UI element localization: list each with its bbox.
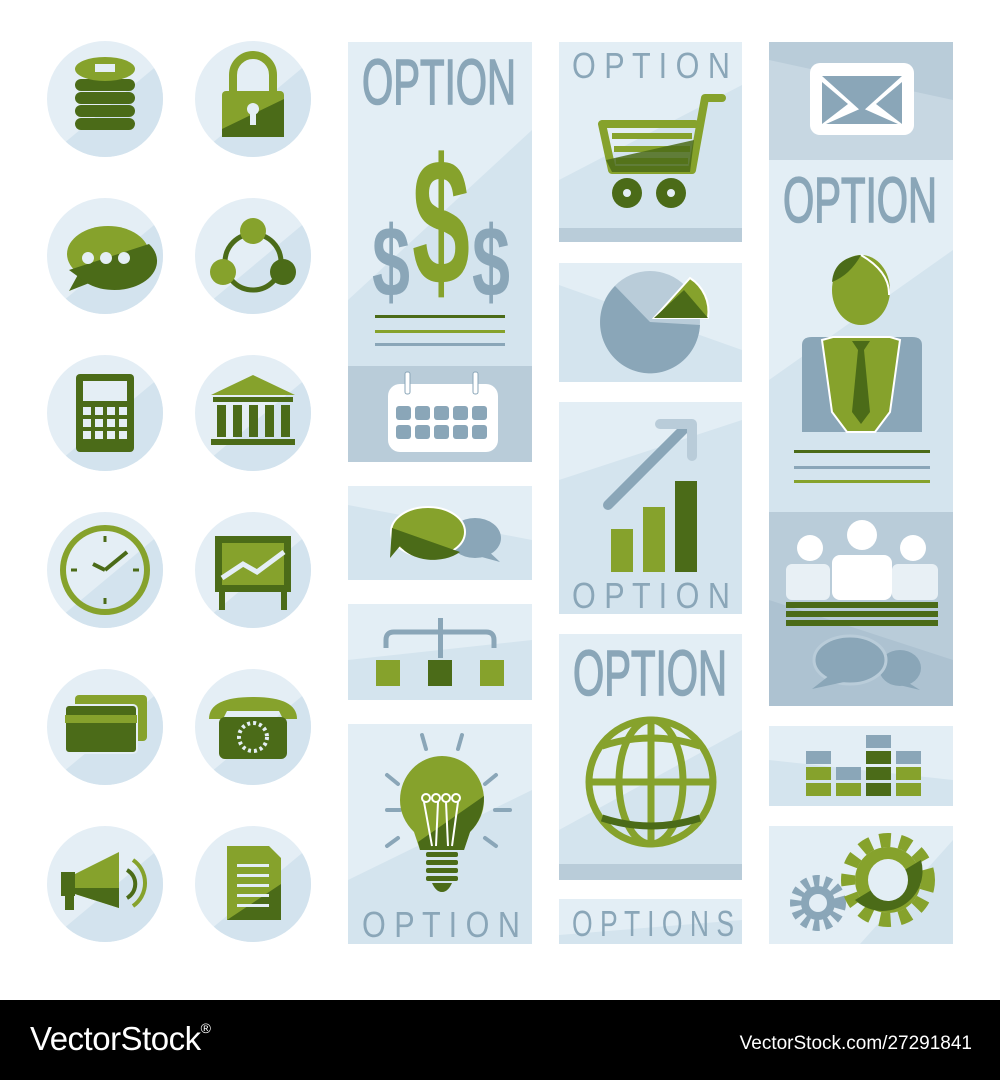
icon: calendar xyxy=(388,372,498,452)
panel: money option xyxy=(348,42,532,462)
panel: envelope xyxy=(769,42,953,160)
icon: arrow xyxy=(608,424,692,505)
heading: OPTION: OPTION xyxy=(362,46,516,118)
panel: globe option xyxy=(559,634,742,880)
circle icon: bank xyxy=(193,355,313,473)
heading: OPTION: O P T I O N xyxy=(572,45,730,86)
main artwork xyxy=(47,41,953,944)
icon: big gear xyxy=(848,840,928,920)
footer: watermark bar xyxy=(0,1000,1000,1080)
bar chart xyxy=(611,481,697,572)
panel: pie chart xyxy=(559,263,742,382)
icon: dollar signs xyxy=(372,122,510,323)
panel: OPTIONS xyxy=(559,899,742,944)
circle icon: clock xyxy=(45,512,165,630)
circle icon: coins xyxy=(45,41,165,159)
label: OPTION: O P T I O N xyxy=(362,904,520,945)
icon: dollar signs: $ xyxy=(412,122,470,323)
icon: team xyxy=(786,520,938,626)
panel: person option xyxy=(769,160,953,512)
panel: shopping cart option xyxy=(559,42,742,242)
icon: cart xyxy=(602,98,722,208)
circle icon: credit cards xyxy=(45,669,165,787)
image id: VectorStock.com/27291841 xyxy=(740,1033,972,1054)
icon: globe xyxy=(589,720,713,844)
heading: OPTION: OPTION xyxy=(573,637,727,709)
circle icon: calculator xyxy=(45,355,165,473)
circle icon: speech bubble xyxy=(45,198,165,316)
text lines xyxy=(794,450,930,483)
circle icon: padlock xyxy=(193,41,313,159)
panel: OPTIONS: O P T I O N S xyxy=(572,903,734,944)
circle icon: megaphone xyxy=(45,826,165,944)
icon: lightbulb xyxy=(387,735,510,892)
panel: growth chart option xyxy=(559,402,742,616)
icon: small gear xyxy=(796,881,840,925)
brand: VectorStock® xyxy=(30,1020,210,1057)
circle icon: telephone xyxy=(193,669,313,787)
icon: dollar signs: $ xyxy=(372,206,410,318)
text lines xyxy=(375,315,505,346)
circle icon: document xyxy=(193,826,313,944)
circle icon: network xyxy=(193,198,313,316)
panel: team xyxy=(769,512,953,706)
icon: dollar signs: $ xyxy=(472,206,510,318)
panel: gears xyxy=(769,826,953,944)
label: OPTION: O P T I O N xyxy=(572,575,730,616)
panel: hierarchy xyxy=(348,604,532,700)
panel: equalizer xyxy=(769,726,953,806)
calendar band xyxy=(348,366,532,462)
icon: chat bubbles xyxy=(812,636,921,690)
panel: lightbulb option xyxy=(348,724,532,945)
panel: chat xyxy=(348,486,532,580)
icon: businessman xyxy=(802,255,922,432)
circle icon: presentation board xyxy=(193,512,313,630)
